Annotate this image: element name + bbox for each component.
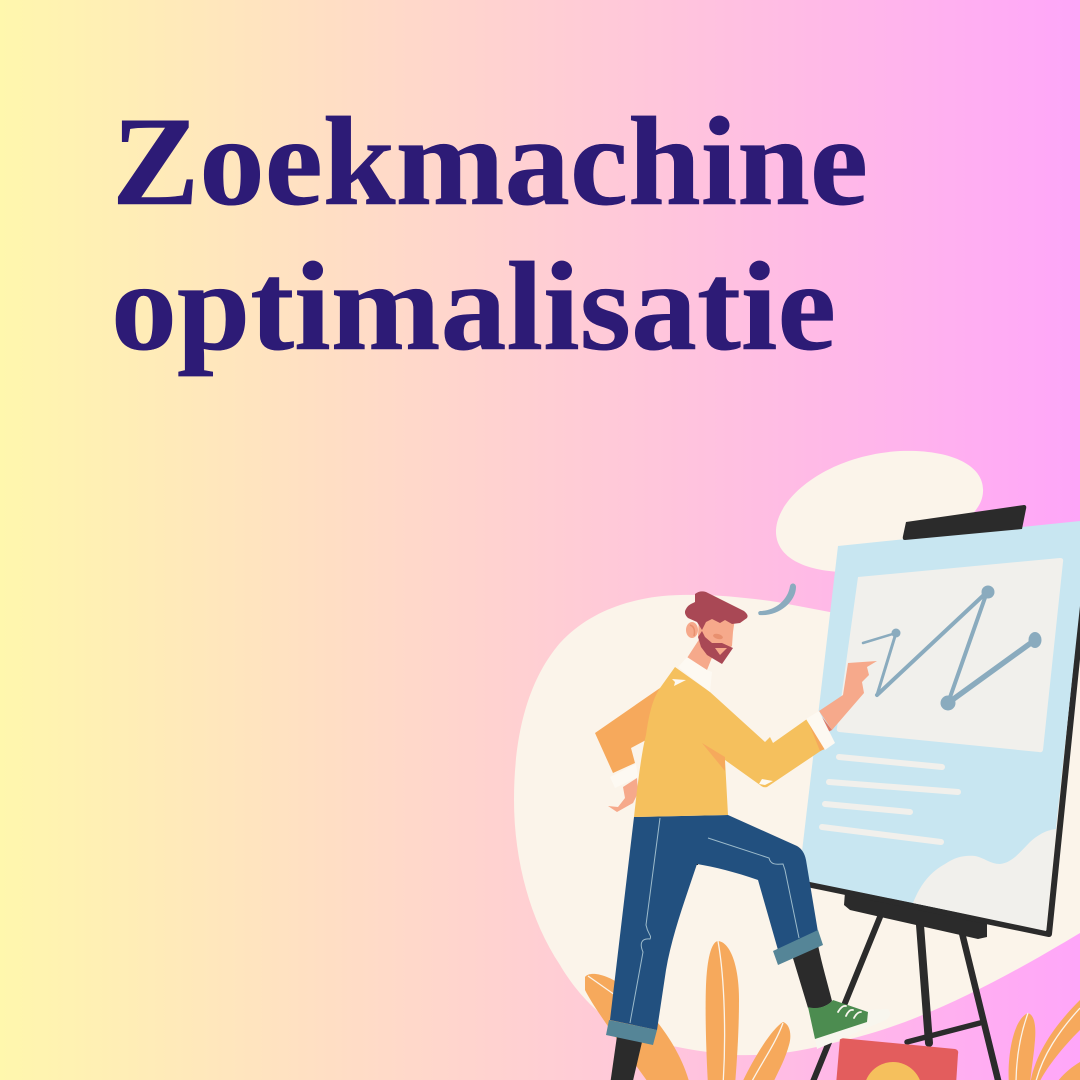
beard <box>698 631 733 664</box>
speech arc <box>758 583 796 615</box>
easel ledge <box>844 892 987 939</box>
left shirt cuff <box>610 764 638 788</box>
sweater <box>634 667 825 817</box>
sweater highlights <box>672 679 773 785</box>
yellow circle on box <box>864 1062 922 1080</box>
leaf: centre <box>706 941 739 1080</box>
background blob: upper <box>776 451 983 572</box>
front shin <box>792 945 832 1009</box>
title: optimalisatie <box>111 237 836 377</box>
easel legs <box>812 917 999 1080</box>
jeans cuffs <box>606 930 823 1045</box>
shoe <box>808 1000 868 1039</box>
right shirt cuff <box>806 711 835 750</box>
eyebrow <box>713 633 723 640</box>
person <box>595 591 890 1080</box>
hair <box>685 591 748 630</box>
leaf: left <box>585 974 690 1080</box>
title: Zoekmachine <box>112 92 868 232</box>
leaves <box>585 941 1080 1080</box>
chart panel <box>837 558 1063 752</box>
sweater fold <box>702 743 725 771</box>
mouth area <box>715 648 727 655</box>
background blob: main <box>514 595 1080 1055</box>
right forearm and pointing hand <box>819 661 877 730</box>
forearm shadow <box>822 717 832 732</box>
leaf veins <box>588 941 1080 1080</box>
line chart <box>863 586 1042 710</box>
sleeve fold <box>807 719 825 751</box>
cloud on sheet <box>913 829 1056 931</box>
jeans <box>610 815 818 1030</box>
flip chart board <box>801 505 1080 934</box>
board clip <box>903 505 1026 540</box>
neck <box>687 638 713 670</box>
board outline <box>807 600 1080 934</box>
title <box>111 92 868 377</box>
shoe laces <box>838 1006 861 1018</box>
left hand <box>608 778 638 812</box>
red box <box>836 1038 958 1080</box>
back shin <box>610 1036 642 1080</box>
leaf: small <box>741 1022 790 1080</box>
ear <box>686 622 698 638</box>
back arm <box>595 688 660 773</box>
collar <box>678 657 712 692</box>
leaf: far right 3 <box>1055 1062 1080 1080</box>
leaf: far right 1 <box>1009 1013 1035 1080</box>
face <box>698 618 735 660</box>
easel <box>812 892 999 1080</box>
board sheet <box>801 521 1080 930</box>
jeans stitching <box>630 818 799 1023</box>
crotch shadow <box>690 843 700 865</box>
shoe sole <box>815 1009 890 1049</box>
text lines <box>822 757 958 842</box>
leaf: far right 2 <box>1030 1000 1080 1080</box>
